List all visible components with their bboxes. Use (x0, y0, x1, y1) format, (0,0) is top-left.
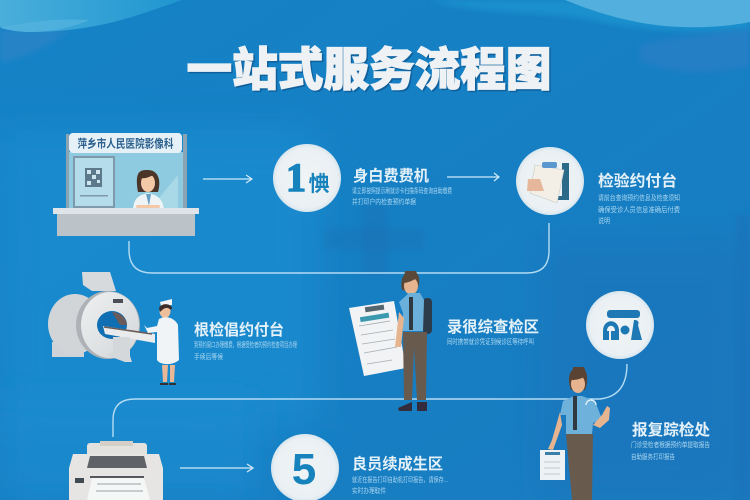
poster with QR code (73, 156, 115, 208)
connector: top row to second row (129, 223, 549, 273)
step 2 text: 检验约付台 (598, 171, 677, 190)
sign: 萍乡市人民医院影像科 (78, 136, 174, 150)
doctor with clipboard (540, 367, 610, 500)
step 1 icon circle: 㥏 (308, 173, 330, 196)
step 3 text: 手续后等候 (194, 352, 223, 361)
step 7 text (352, 454, 448, 495)
MRI scanner (48, 272, 155, 362)
step 4 text (447, 317, 539, 346)
counter (53, 208, 199, 236)
connector: second row to bottom row (113, 364, 627, 437)
arrow 1 (203, 175, 252, 183)
step 6 text (631, 420, 710, 461)
arrow 2 (447, 173, 499, 181)
step 2 text: 确保受诊人员信息准确后付费 (598, 205, 680, 214)
step 3 text: 到预约窗口办理缴费，根据受检者的预约检查项目办理 (194, 340, 297, 349)
patient with clipboard (349, 271, 432, 411)
printer (69, 441, 163, 500)
step 7 text: 实时办理取件 (352, 486, 386, 495)
step 1 text: 并打印户内检查预约单据 (352, 197, 416, 206)
step 6 text: 自助服务打印报告 (631, 452, 675, 461)
step 1 icon circle (273, 144, 341, 212)
step 1 text (352, 167, 452, 206)
step 5 number circle: 5 (292, 445, 316, 494)
title: 一站式服务流程图 (188, 45, 553, 97)
sign (69, 133, 182, 153)
step 5 number circle (271, 434, 339, 500)
step 7 text: 良员续成生区 (352, 454, 443, 473)
step 3 text: 根检倡约付台 (194, 320, 284, 339)
step 2 text (598, 171, 680, 225)
step 1 icon circle: 1 (286, 155, 306, 200)
step 6 text: 门诊受检者根据预约单提取报告 (631, 440, 710, 449)
clipboard (349, 301, 406, 376)
icon: clipboard and hand (527, 162, 569, 203)
arrow 3 (180, 464, 253, 472)
step 1 text: 请立即按照提示刷就诊卡扫描条码查询自助缴费 (352, 186, 452, 195)
step 7 text: 就近在报告打印自助机打印报告，请保存... (352, 475, 448, 484)
decorative top waves (0, 0, 750, 72)
title: 一站式服务流程图 (186, 44, 552, 96)
step 3 text (194, 320, 297, 361)
step 1 text: 身白费费机 (353, 167, 429, 185)
small clipboard (540, 450, 565, 480)
step 2 icon circle (516, 147, 584, 215)
receptionist (133, 170, 164, 209)
step 4 text: 录很综查检区 (447, 317, 539, 336)
step 6 text: 报复踪检处 (632, 420, 710, 439)
registration desk (53, 133, 199, 236)
step 5 icon circle (586, 291, 654, 359)
step 4 text: 同时携带就诊凭证到候诊区等待呼叫 (447, 337, 534, 346)
nurse (144, 299, 179, 385)
step 2 text: 请前台查询预约信息及检查须知 (598, 193, 680, 202)
step 2 text: 说明 (598, 216, 610, 225)
icon: waiting room (603, 310, 642, 340)
